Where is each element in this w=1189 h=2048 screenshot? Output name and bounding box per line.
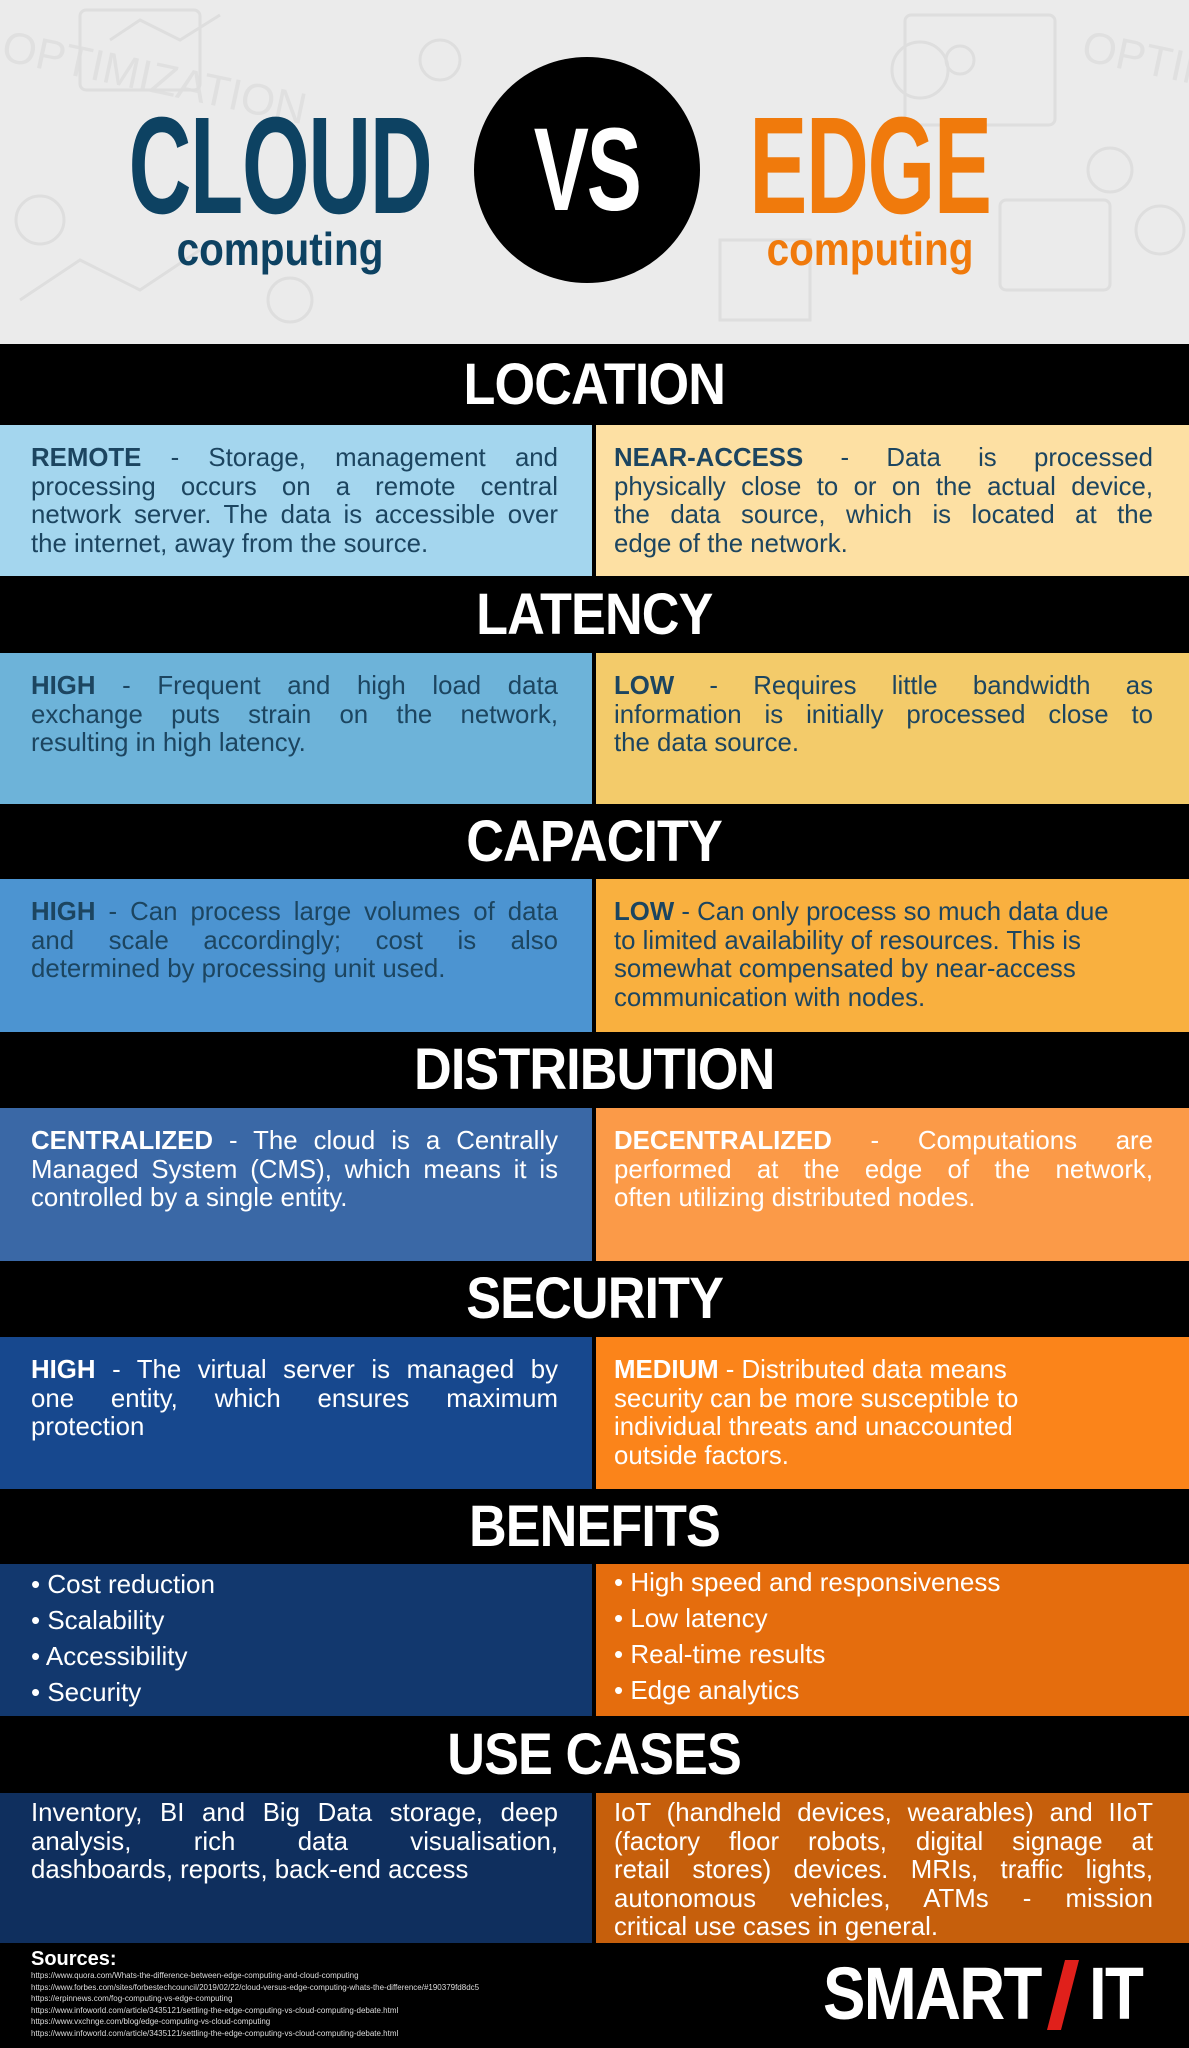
logo: SMART/IT: SMART bbox=[823, 1952, 1041, 2035]
panel: cloud capacity bbox=[0, 879, 592, 1032]
sources: https://www.vxchnge.com/blog/edge-computing-vs-cloud-computing bbox=[31, 2017, 270, 2026]
VS circle bbox=[474, 57, 700, 283]
panel: edge latency: LOW - Requires little bandwidth as bbox=[614, 672, 1153, 700]
panel: edge location: physically close to or on the actual device, bbox=[614, 472, 1153, 500]
panel: edge benefits: • Low latency bbox=[614, 1603, 768, 1633]
panel: cloud location: network server. The data is accessible over bbox=[31, 501, 558, 529]
heading: LOCATION bbox=[0, 344, 1189, 425]
panel: cloud latency: exchange puts strain on the network, bbox=[31, 700, 558, 728]
heading: SECURITY: SECURITY bbox=[466, 1266, 723, 1331]
panel: cloud capacity: determined by processing unit used. bbox=[31, 955, 445, 983]
panel: cloud latency: resulting in high latency. bbox=[31, 729, 306, 757]
sources: https://www.infoworld.com/article/3435121/settling-the-edge-computing-vs-cloud-computing-debate.html bbox=[31, 2028, 398, 2038]
panel: cloud use cases: Inventory, BI and Big Data storage, deep bbox=[31, 1799, 558, 1827]
panel: cloud latency bbox=[0, 653, 592, 804]
logo: SMART/IT bbox=[823, 1952, 1144, 2035]
panel: cloud location bbox=[0, 425, 592, 576]
header bbox=[0, 0, 1189, 344]
panel: edge capacity: somewhat compensated by near-access bbox=[614, 955, 1076, 983]
heading: LATENCY: LATENCY bbox=[476, 582, 713, 647]
title: EDGE computing: EDGE bbox=[749, 89, 991, 243]
panel: cloud security: protection bbox=[31, 1413, 144, 1441]
panel: cloud use cases bbox=[0, 1793, 592, 1943]
panel: cloud distribution: CENTRALIZED - The cloud is a Centrally bbox=[31, 1127, 558, 1155]
panel: cloud distribution: controlled by a single entity. bbox=[31, 1184, 347, 1212]
panel: edge location bbox=[596, 425, 1189, 576]
panel: cloud benefits: • Scalability bbox=[31, 1605, 164, 1635]
panel: cloud distribution: Managed System (CMS), which means it is bbox=[31, 1156, 558, 1184]
panel: edge distribution: DECENTRALIZED - Computations are bbox=[614, 1127, 1153, 1155]
panel: edge benefits: • Edge analytics bbox=[614, 1675, 799, 1705]
panel: cloud benefits: • Accessibility bbox=[31, 1641, 187, 1671]
panel: edge benefits: • High speed and responsiveness bbox=[614, 1567, 1000, 1597]
panel: cloud capacity: HIGH - Can process large volumes of data bbox=[31, 898, 558, 926]
panel: cloud use cases: dashboards, reports, back-end access bbox=[31, 1856, 468, 1884]
panel: cloud location: the internet, away from the source. bbox=[31, 530, 428, 558]
panel: edge distribution bbox=[596, 1108, 1189, 1261]
heading: DISTRIBUTION: DISTRIBUTION bbox=[414, 1037, 775, 1102]
panel: edge capacity: LOW - Can only process so much data due bbox=[614, 898, 1109, 926]
heading: SECURITY bbox=[0, 1261, 1189, 1337]
title: EDGE computing: computing bbox=[767, 223, 973, 275]
panel: edge use cases: (factory floor robots, digital signage at bbox=[614, 1828, 1153, 1856]
logo: SMART/IT: IT bbox=[1089, 1952, 1142, 2035]
panel: edge benefits bbox=[596, 1564, 1189, 1716]
panel: edge security: security can be more susceptible to bbox=[614, 1384, 1018, 1412]
sources bbox=[31, 1948, 479, 2038]
background doodles: OPTIMIZATION bbox=[0, 22, 311, 134]
panel: edge latency: information is initially processed close to bbox=[614, 700, 1153, 728]
panel: edge latency bbox=[596, 653, 1189, 804]
heading: BENEFITS: BENEFITS bbox=[469, 1494, 720, 1559]
panel: edge latency: the data source. bbox=[614, 729, 799, 757]
panel: edge distribution: performed at the edge of the network, bbox=[614, 1156, 1153, 1184]
panel: cloud location: processing occurs on a remote central bbox=[31, 472, 558, 500]
panel: edge location: the data source, which is located at the bbox=[614, 501, 1153, 529]
panel: cloud distribution bbox=[0, 1108, 592, 1261]
sources: https://www.forbes.com/sites/forbestechcouncil/2019/02/22/cloud-versus-edge-computing-whats-the-difference/#190379fd8dc5 bbox=[31, 1982, 479, 1992]
panel: edge location: edge of the network. bbox=[614, 530, 848, 558]
panel: cloud security: HIGH - The virtual server is managed by bbox=[31, 1356, 558, 1384]
heading: LOCATION: LOCATION bbox=[464, 352, 725, 417]
panel: edge use cases: IoT (handheld devices, wearables) and IIoT bbox=[614, 1799, 1153, 1827]
panel: edge use cases: critical use cases in general. bbox=[614, 1913, 938, 1941]
heading: LATENCY bbox=[0, 576, 1189, 653]
panel: cloud benefits: • Cost reduction bbox=[31, 1569, 215, 1599]
heading: DISTRIBUTION bbox=[0, 1032, 1189, 1108]
panel: cloud security: one entity, which ensures maximum bbox=[31, 1384, 558, 1412]
background doodles bbox=[0, 8, 1189, 324]
panel: edge use cases: autonomous vehicles, ATMs - mission bbox=[614, 1884, 1153, 1912]
panel: edge use cases: retail stores) devices. MRIs, traffic lights, bbox=[614, 1856, 1153, 1884]
sources: https://erpinnews.com/fog-computing-vs-edge-computing bbox=[31, 1994, 232, 2003]
panel: cloud benefits bbox=[0, 1564, 592, 1716]
sources: Sources: bbox=[31, 1948, 117, 1970]
VS circle: VS bbox=[534, 104, 640, 236]
panel: edge distribution: often utilizing distributed nodes. bbox=[614, 1184, 975, 1212]
panel: cloud latency: HIGH - Frequent and high load data bbox=[31, 672, 558, 700]
sources: https://www.infoworld.com/article/3435121/settling-the-edge-computing-vs-cloud-computing-debate.html bbox=[31, 2006, 398, 2014]
panel: edge benefits: • Real-time results bbox=[614, 1639, 825, 1669]
panel: edge security: outside factors. bbox=[614, 1442, 789, 1470]
panel: edge capacity bbox=[596, 879, 1189, 1032]
title: CLOUD computing: CLOUD bbox=[129, 89, 431, 243]
heading: USE CASES bbox=[0, 1716, 1189, 1793]
panel: cloud capacity: and scale accordingly; cost is also bbox=[31, 926, 558, 954]
panel: edge capacity: communication with nodes. bbox=[614, 984, 925, 1012]
panel: edge location: NEAR-ACCESS - Data is processed bbox=[614, 444, 1153, 472]
heading: USE CASES: USE CASES bbox=[448, 1722, 741, 1787]
panel: cloud location: REMOTE - Storage, management and bbox=[31, 444, 558, 472]
panel: cloud security bbox=[0, 1337, 592, 1489]
sources: https://www.quora.com/Whats-the-difference-between-edge-computing-and-cloud-computing bbox=[31, 1971, 359, 1980]
panel: cloud use cases: analysis, rich data visualisation, bbox=[31, 1828, 558, 1856]
panel: edge security: MEDIUM - Distributed data means bbox=[614, 1356, 1007, 1384]
panel: edge use cases bbox=[596, 1793, 1189, 1943]
panel: edge security: individual threats and unaccounted bbox=[614, 1413, 1013, 1441]
panel: edge capacity: to limited availability of resources. This is bbox=[614, 926, 1081, 954]
panel: edge security bbox=[596, 1337, 1189, 1489]
panel: cloud benefits: • Security bbox=[31, 1677, 141, 1707]
title: CLOUD computing: computing bbox=[177, 223, 383, 275]
heading: CAPACITY: CAPACITY bbox=[467, 809, 722, 874]
heading: BENEFITS bbox=[0, 1489, 1189, 1564]
heading: CAPACITY bbox=[0, 804, 1189, 879]
